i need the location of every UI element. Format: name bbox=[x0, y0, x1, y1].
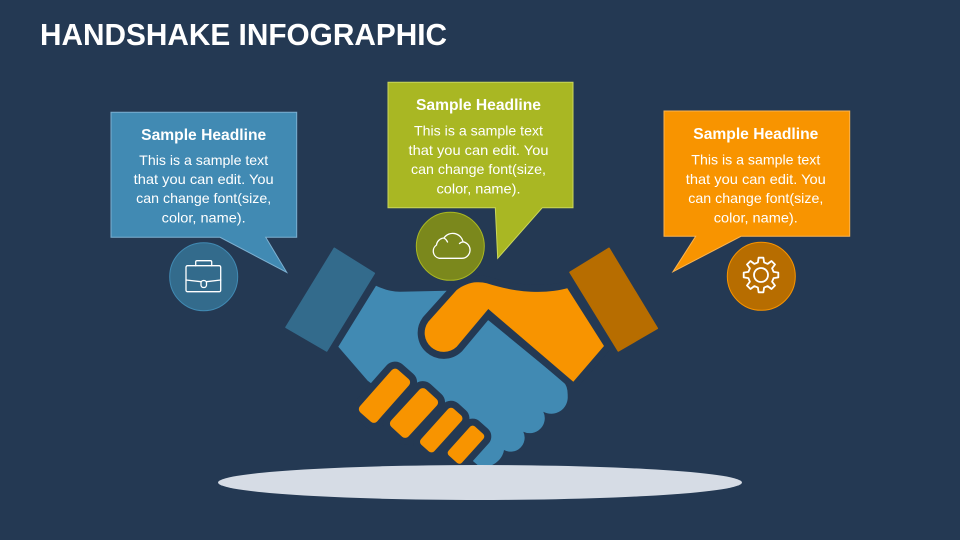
callout shape bbox=[664, 111, 850, 272]
blue cuff bbox=[286, 248, 374, 351]
body text: can change font(size, bbox=[136, 190, 271, 206]
body text: This is a sample text bbox=[139, 152, 268, 168]
headline: Sample Headline bbox=[416, 97, 541, 114]
panel: blue callout bbox=[111, 112, 297, 272]
orange hand bbox=[425, 282, 604, 382]
callout shape bbox=[388, 82, 573, 258]
body text: This is a sample text bbox=[691, 152, 820, 168]
icon: cloud bbox=[416, 212, 484, 280]
body text: color, name). bbox=[436, 180, 520, 196]
body text: color, name). bbox=[162, 210, 246, 226]
illustration: handshake bbox=[286, 248, 657, 467]
headline: Sample Headline bbox=[693, 126, 819, 143]
panel: orange callout bbox=[664, 111, 850, 272]
body text: can change font(size, bbox=[411, 161, 546, 177]
orange cuff bbox=[570, 248, 657, 351]
title: HANDSHAKE INFOGRAPHIC bbox=[40, 18, 447, 52]
body text: color, name). bbox=[714, 210, 798, 226]
panel: green callout bbox=[388, 82, 573, 258]
callout shape bbox=[111, 112, 297, 272]
headline: Sample Headline bbox=[141, 127, 267, 144]
orange fingers bbox=[357, 367, 486, 465]
icon: briefcase bbox=[170, 243, 238, 311]
body text: that you can edit. You bbox=[408, 142, 548, 158]
body text: that you can edit. You bbox=[134, 171, 274, 187]
body text bbox=[408, 122, 548, 196]
blue hand bbox=[338, 286, 568, 467]
body text bbox=[686, 152, 826, 226]
body text: that you can edit. You bbox=[686, 171, 826, 187]
finger 3 bbox=[418, 406, 464, 454]
base ellipse bbox=[218, 465, 742, 500]
body text: This is a sample text bbox=[414, 122, 543, 138]
finger 4 bbox=[446, 424, 486, 465]
finger 2 bbox=[388, 386, 440, 440]
body text bbox=[134, 152, 274, 226]
icon: gear bbox=[727, 242, 795, 310]
finger 1 bbox=[357, 367, 412, 425]
halo around orange hand and fingers bbox=[357, 282, 604, 465]
body text: can change font(size, bbox=[688, 190, 823, 206]
